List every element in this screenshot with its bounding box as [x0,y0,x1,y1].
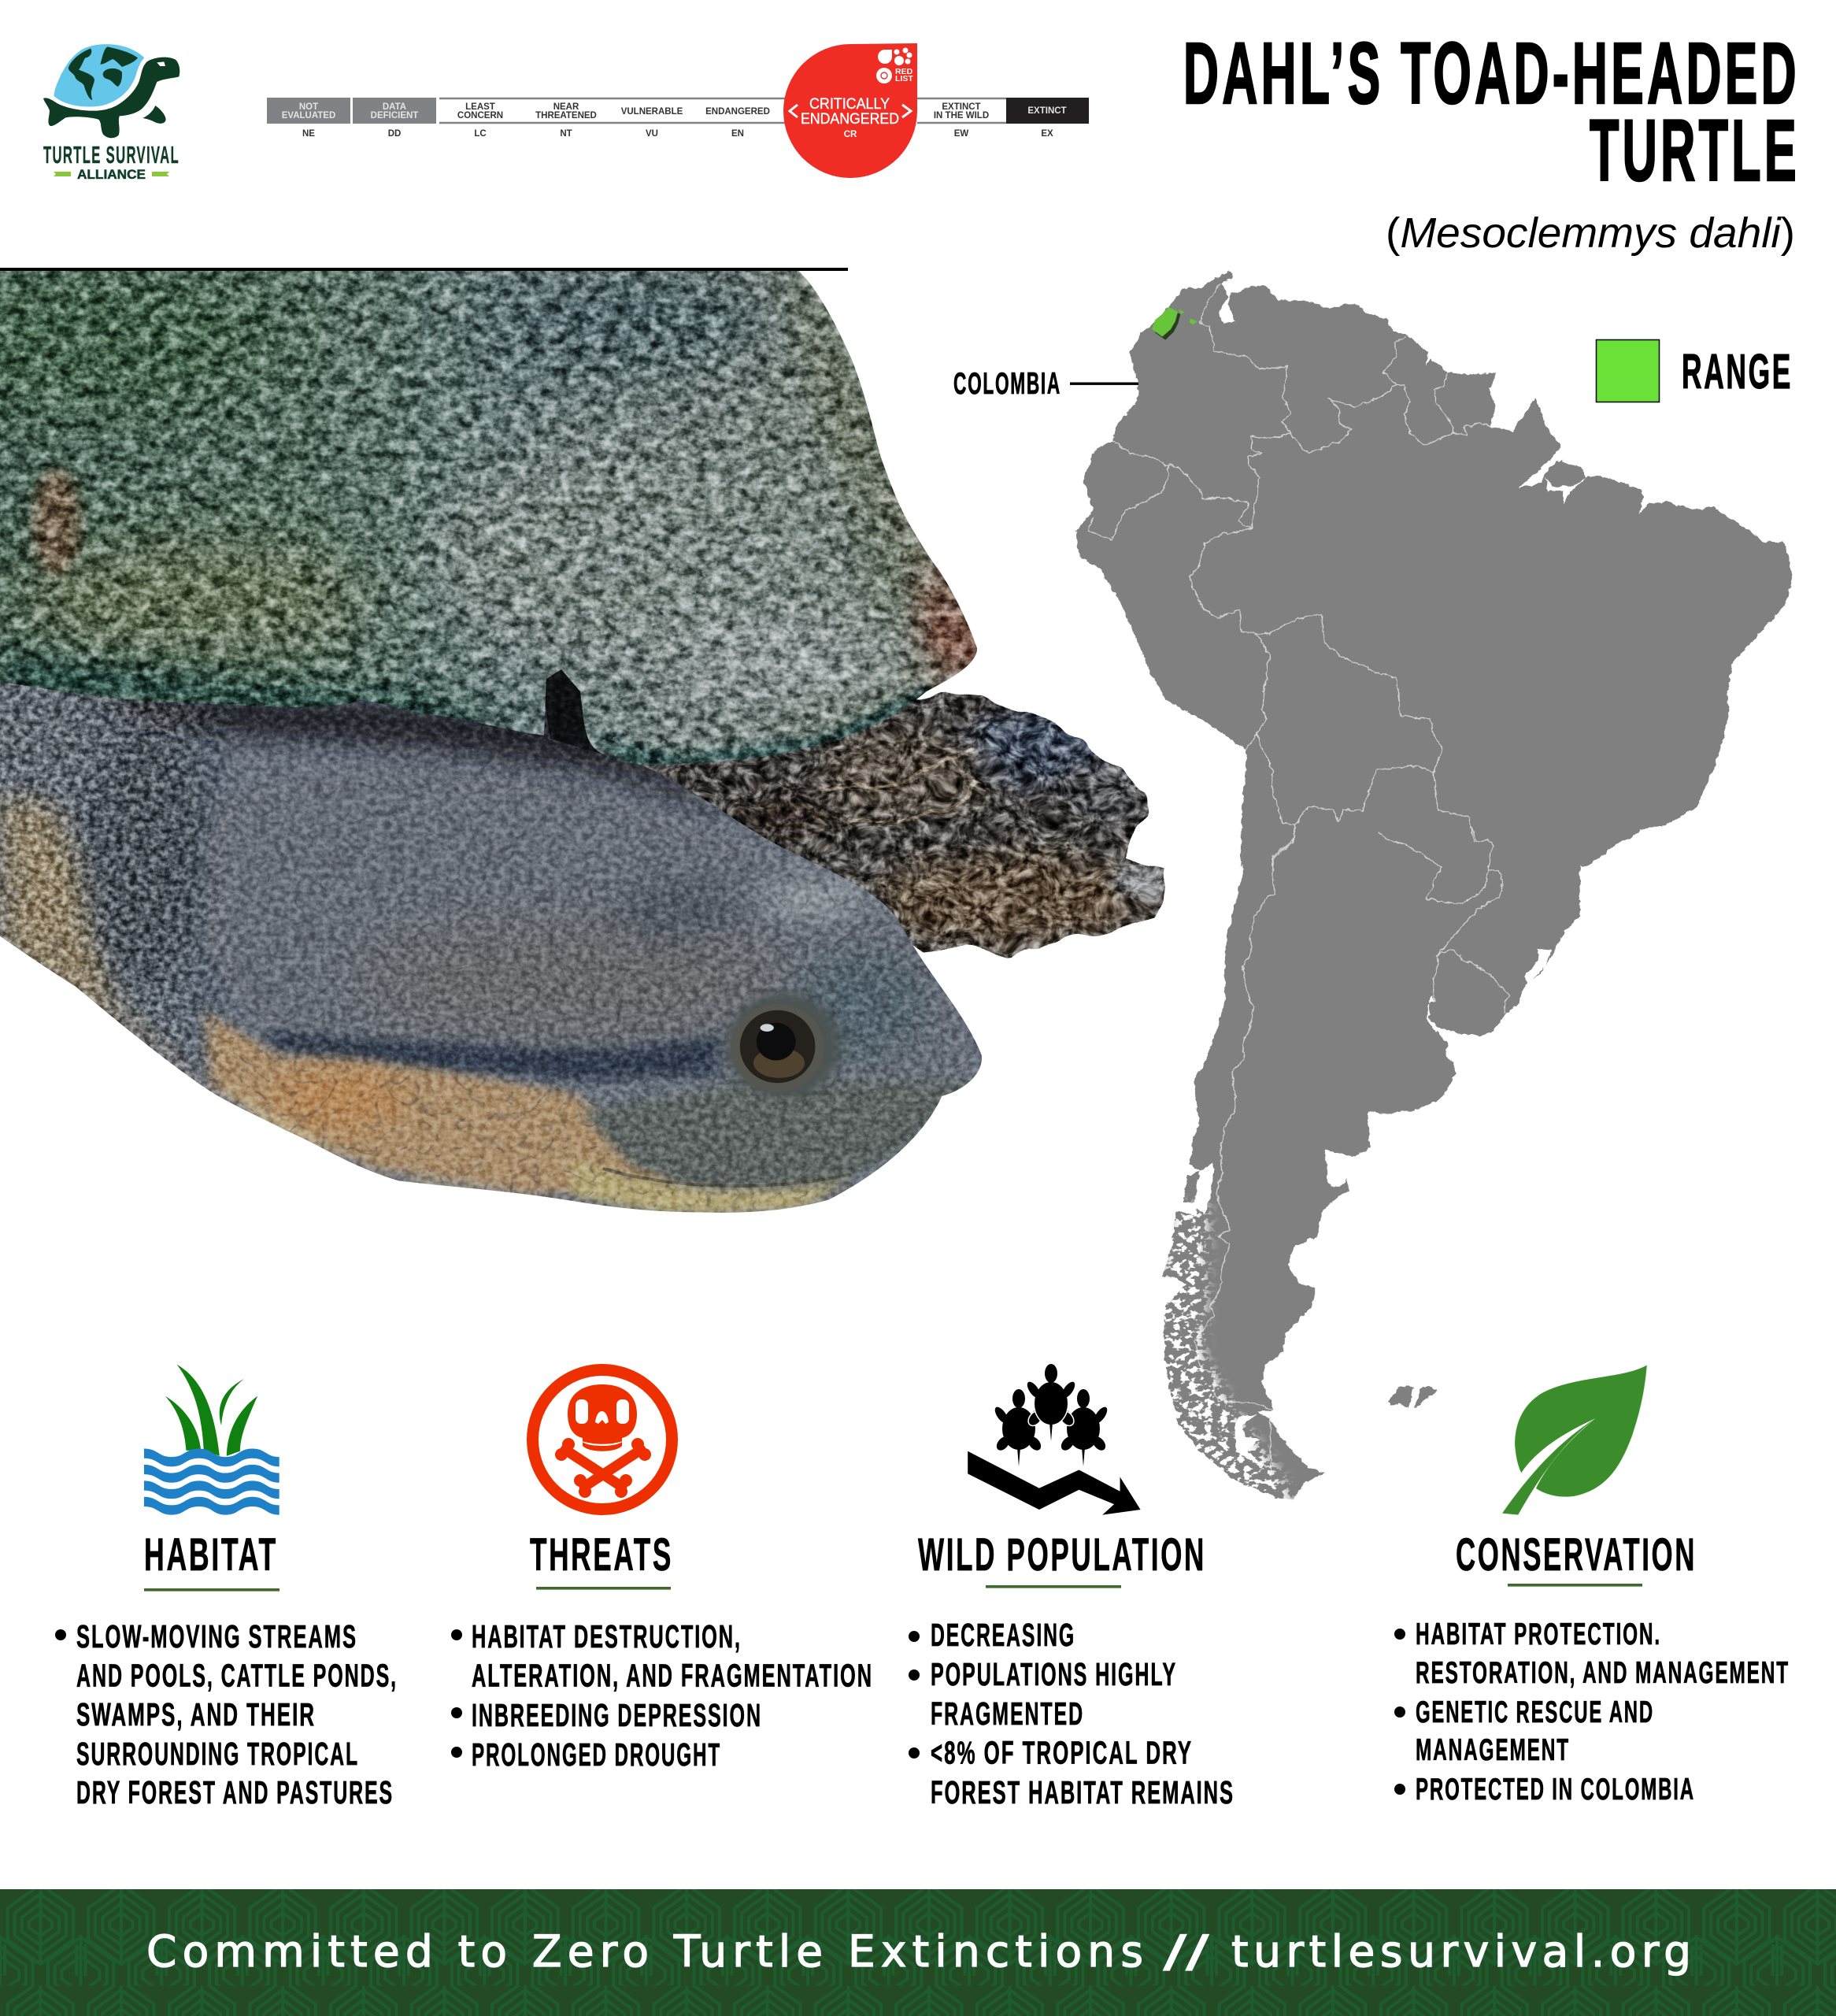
status bar lines [439,98,1006,123]
heading: threats: THREATS [530,1529,673,1581]
status NT: NT [560,129,572,139]
falkland islands [1388,1385,1438,1408]
status LC [457,102,503,139]
status EN: EN [731,129,744,139]
footer tagline: Committed to Zero Turtle Extinctions [146,1926,1143,1977]
CR label: CRITICALLY [809,95,890,113]
threats text: INBREEDING DEPRESSION [472,1697,762,1733]
habitat text: DRY FOREST AND PASTURES [76,1774,394,1810]
icon: water and grass [144,1365,279,1515]
heading: habitat: HABITAT [144,1529,278,1581]
status CR red drop: CR [844,130,857,139]
panel: habitat [55,1365,398,1810]
status EW: EXTINCT [942,102,981,112]
title [1183,25,1800,199]
logo subtitle: ALLIANCE [77,167,146,182]
divider line above photo [0,268,848,271]
land south-east [1378,825,1640,1102]
land south [1163,827,1496,1500]
status VU: VULNERABLE [621,107,683,117]
threats text: PROLONGED DROUGHT [472,1736,721,1773]
wild population text: FOREST HABITAT REMAINS [931,1774,1234,1810]
heading: wild population: WILD POPULATION [918,1529,1206,1581]
red list emblem [876,47,913,83]
logo: Turtle Survival Alliance [43,44,180,182]
status EW [934,102,989,139]
neck [0,679,226,1093]
conservation text: GENETIC RESCUE AND [1416,1695,1654,1729]
footer banner [0,1889,1836,2016]
range patch [1152,307,1197,340]
status CR red drop [783,43,917,178]
dark head band [264,1030,724,1080]
country borders south-east [1378,827,1510,1014]
turtle photo illustration [0,265,1175,1225]
textures [0,660,994,1225]
IUCN red list status scale [267,43,1089,178]
status EX [1006,98,1089,139]
red list emblem: RED [895,67,913,76]
status LC: CONCERN [457,111,503,120]
panel: wild population [909,1364,1234,1810]
wild population text: <8% OF TROPICAL DRY [931,1734,1193,1770]
map legend: range [1597,340,1793,402]
status EN [705,107,770,139]
status DD [353,98,436,139]
wild population text: POPULATIONS HIGHLY [931,1656,1177,1692]
threats text: HABITAT DESTRUCTION, [472,1618,742,1655]
map of South America [953,272,1793,1528]
status EX: EXTINCT [1027,106,1067,116]
status DD: DD [388,129,401,139]
turtle eye [727,992,841,1098]
Colombia label: COLOMBIA [953,367,1061,401]
habitat text [55,1618,398,1810]
footer tagline [146,1926,1691,1977]
icon: declining turtles [968,1364,1141,1515]
status DD: DEFICIENT [371,111,418,120]
wild population text: DECREASING [931,1617,1075,1653]
footer tagline: turtlesurvival.org [1231,1926,1691,1977]
habitat text: AND POOLS, CATTLE PONDS, [76,1657,398,1693]
fjords of southern Chile [1134,1173,1323,1528]
wild population text [909,1617,1234,1810]
jaw [580,1080,972,1188]
status EX: EX [1041,129,1053,139]
status NT [535,102,597,139]
status LC: LEAST [465,102,495,112]
threats text [451,1618,873,1773]
logo wordmark: TURTLE SURVIVAL [43,141,180,169]
scientific name: (Mesoclemmys dahli) [1386,209,1795,257]
icon: leaf [1502,1365,1647,1515]
shadow under shell [76,685,753,817]
status VU: VU [646,129,658,139]
footer tagline: // [1164,1926,1209,1977]
icon: skull and crossbones [532,1370,672,1509]
status CR red drop: ENDANGERED [801,110,899,128]
conservation text: HABITAT PROTECTION. [1416,1618,1661,1651]
habitat text: SWAMPS, AND THEIR [76,1696,316,1732]
habitat text: SURROUNDING TROPICAL [76,1736,359,1772]
conservation text: MANAGEMENT [1416,1733,1570,1767]
status NE [267,98,350,139]
conservation text [1394,1618,1790,1807]
status VU [621,107,683,139]
status NT: THREATENED [535,111,597,120]
habitat text: SLOW-MOVING STREAMS [76,1618,357,1655]
land north [1075,272,1793,866]
panel: threats [451,1370,873,1773]
status DD: DATA [383,102,406,112]
status EW: EW [954,129,968,139]
rear foot [639,691,1165,958]
logo green bars [54,172,169,176]
shell [0,265,987,773]
head top [202,802,228,972]
land masses and borders [1075,272,1793,1500]
status EW: IN THE WILD [934,111,989,120]
status LC: LC [474,129,487,139]
panel: conservation [1394,1365,1790,1807]
lower lip [572,1156,851,1215]
icon: downward arrow [968,1451,1141,1515]
status NE: EVALUATED [282,111,335,120]
wild population text: FRAGMENTED [931,1695,1084,1732]
country borders north [1088,284,1492,866]
status NT: NEAR [553,102,579,112]
status NE: NE [302,129,315,139]
orange cheek [203,1011,678,1194]
status NE: NOT [299,102,318,112]
country borders south [1195,827,1296,1476]
head and neck [0,660,994,1225]
water cut-outs [1194,447,1586,1465]
threats text: ALTERATION, AND FRAGMENTATION [472,1657,873,1693]
status EN: ENDANGERED [705,107,770,117]
red list emblem: LIST [895,74,913,83]
